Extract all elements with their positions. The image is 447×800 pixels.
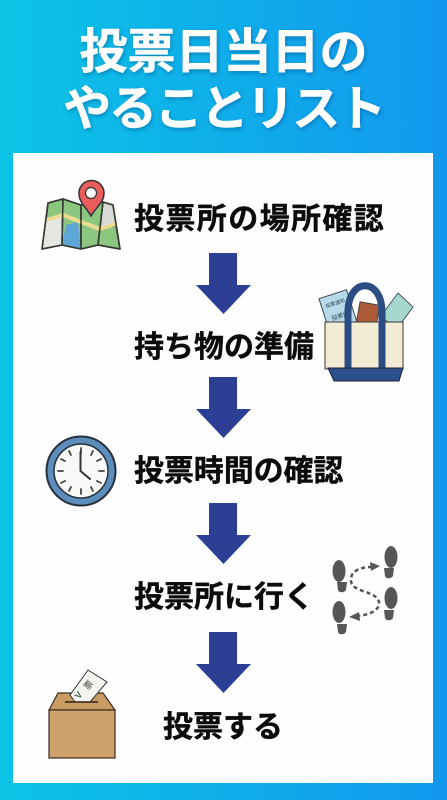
icon: ballot box — [48, 669, 116, 759]
icon: ballot box: 票 — [82, 679, 95, 692]
icon: clock — [46, 436, 116, 506]
arrow 2 — [196, 377, 251, 438]
icon: tote bag: 投票所 — [331, 309, 350, 323]
step 1 label: 投票所の場所確認 — [134, 203, 385, 236]
arrow 1 — [196, 253, 251, 314]
step 4 label: 投票所に行く — [134, 581, 314, 614]
title — [63, 26, 384, 136]
step 5 label: 投票する — [163, 711, 283, 744]
icon: footprints — [332, 546, 398, 634]
icon: tote bag: 投票通知 — [325, 297, 346, 310]
arrow 4 — [196, 632, 251, 693]
title line 1: 投票日当日の — [79, 26, 368, 79]
panel: checklist — [13, 153, 433, 783]
step 2 label: 持ち物の準備 — [134, 331, 314, 364]
title line 2: やることリスト — [63, 83, 384, 136]
step 3 label: 投票時間の確認 — [134, 455, 343, 488]
arrow 3 — [196, 503, 251, 564]
icon: ballot box: V — [73, 690, 84, 701]
icon: map with pin — [41, 180, 121, 250]
icon: tote bag — [318, 282, 414, 382]
